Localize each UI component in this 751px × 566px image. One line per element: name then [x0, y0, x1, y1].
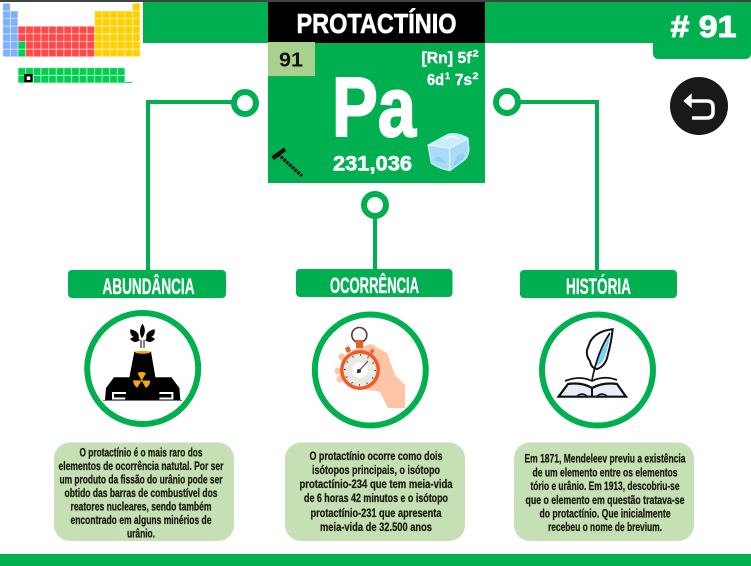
element number tab: # 91: [670, 9, 736, 44]
text block: history: de um elemento entre os elementos: [532, 466, 678, 480]
connector: history: [496, 91, 597, 271]
text block: occurrence: [285, 442, 465, 541]
icon: quill and book: [542, 314, 653, 426]
back button: [670, 77, 728, 135]
text block: history: [514, 442, 694, 541]
heading: occurrence: OCORRÊNCIA: [330, 273, 419, 298]
connector: abundance: [148, 92, 256, 271]
element title: PROTACTÍNIO: [296, 8, 456, 39]
electron configuration: 6d: [427, 72, 444, 89]
text block: history: recebeu o nome de brevium.: [548, 520, 662, 534]
text block: abundance: [54, 442, 234, 541]
atomic number: 91: [279, 50, 303, 72]
icon: stopwatch in hand: [315, 314, 426, 426]
element card: [268, 42, 485, 183]
electron configuration: [422, 48, 478, 89]
electron configuration: 2: [472, 71, 478, 81]
heading: abundance: [68, 270, 226, 299]
electron configuration: [Rn] 5f: [422, 50, 472, 67]
text block: abundance: obtido das barras de combustível dos: [64, 486, 218, 500]
electron configuration: 7s: [455, 72, 472, 89]
text block: abundance: encontrado em alguns minérios de: [70, 513, 212, 527]
heading: abundance: ABUNDÂNCIA: [102, 274, 195, 299]
electron configuration: 1: [445, 71, 450, 81]
periodic table locator: [3, 4, 140, 83]
panel: occurrence: [285, 269, 465, 541]
text block: history: tório e urânio. Em 1913, descobriu-se: [530, 479, 680, 493]
heading: history: [520, 270, 677, 299]
text block: abundance: urânio.: [127, 526, 155, 540]
icon: ice cube: [428, 134, 469, 171]
text block: abundance: elementos de ocorrência natutal. Por ser: [58, 459, 224, 473]
element title: [268, 2, 485, 43]
text block: abundance: reatores nucleares, sendo também: [70, 500, 212, 514]
heading: history: HISTÓRIA: [566, 274, 631, 299]
text block: occurrence: protactínio-234 que tem meia-vida: [300, 477, 453, 491]
text block: history: do protactínio. Que inicialmente: [540, 506, 671, 520]
atomic number: [268, 42, 315, 76]
icon: reactor: [87, 313, 198, 424]
heading: occurrence: [296, 269, 452, 298]
text block: occurrence: meia-vida de 32.500 anos: [320, 520, 432, 534]
electron configuration: 2: [472, 48, 478, 58]
text block: occurrence: protactínio-231 que apresenta: [310, 506, 442, 520]
element symbol: Pa: [332, 60, 417, 154]
panel: history: [514, 270, 694, 541]
panel: abundance: [54, 270, 234, 541]
text block: abundance: um produto da fissão do urânio pode ser: [60, 472, 223, 486]
text block: history: que o elemento em questão tratava-se: [526, 493, 685, 507]
text block: occurrence: de 6 horas 42 minutos e o isótopo: [304, 491, 448, 505]
icon: screw: [272, 148, 302, 176]
text block: occurrence: O protactínio ocorre como dois: [310, 449, 443, 463]
atomic mass: 231,036: [333, 152, 412, 176]
element number tab: [653, 9, 751, 59]
text block: abundance: O protactínio é o mais raro dos: [80, 446, 203, 460]
text block: occurrence: isótopos principais, o isótopo: [312, 463, 440, 477]
top dark edge: [0, 0, 751, 2]
bottom bar: [0, 554, 751, 566]
top green band: [143, 2, 751, 43]
connector: occurrence: [364, 194, 386, 270]
